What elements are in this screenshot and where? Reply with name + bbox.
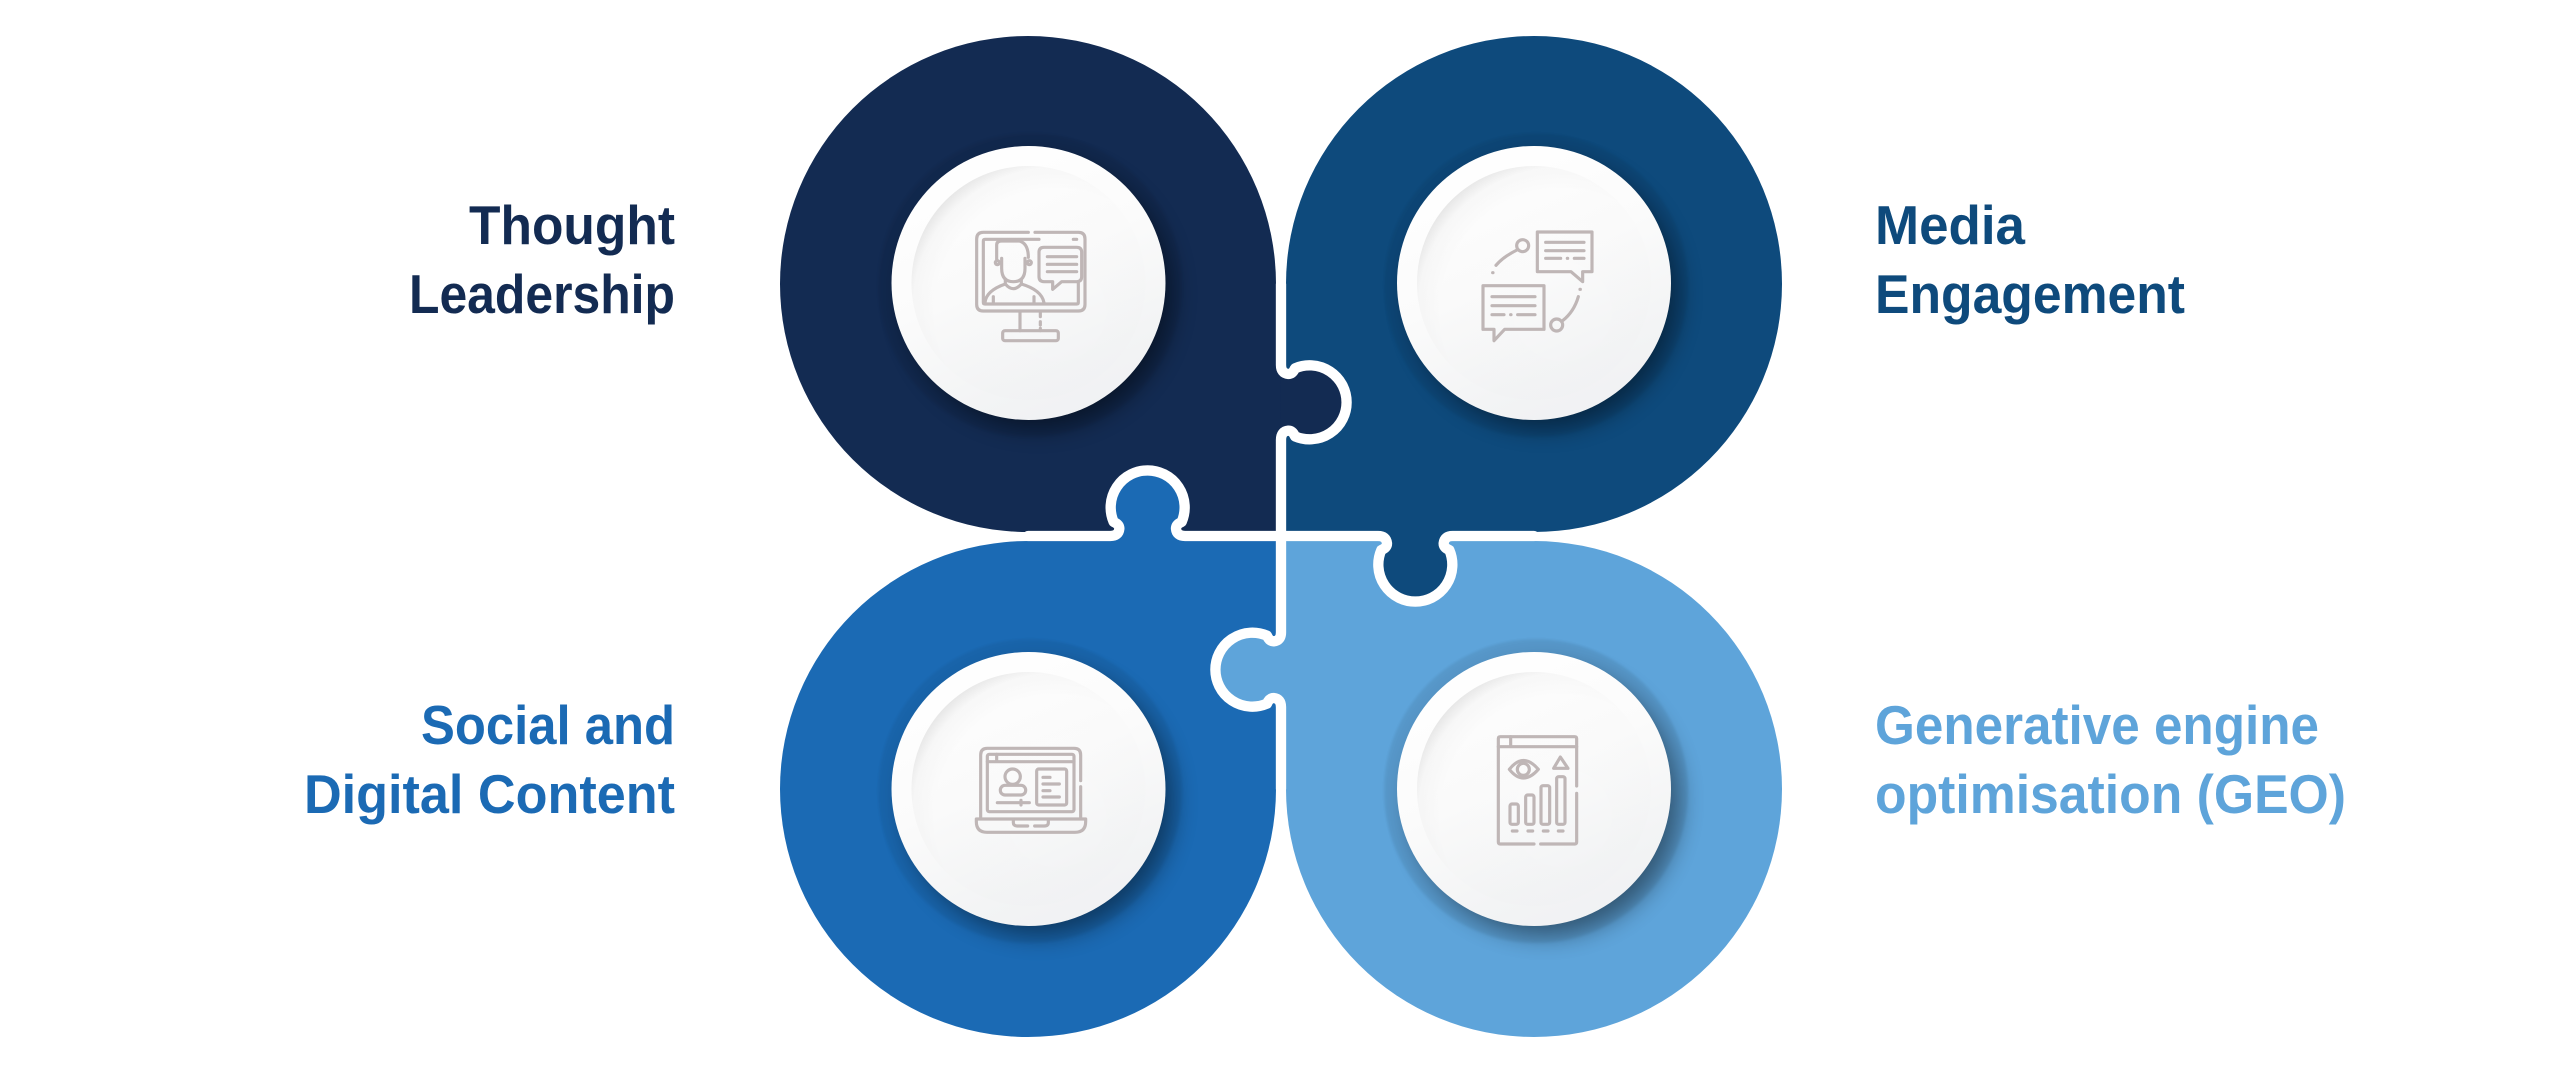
puzzle tabs — [1110, 365, 1453, 707]
puzzle graphic — [780, 36, 1782, 1037]
label: media engagement — [1875, 194, 2185, 325]
label: media engagement: Engagement — [1875, 263, 2185, 325]
disc: thought leadership — [878, 133, 1182, 437]
icon: monitor with presenter — [977, 232, 1085, 341]
tab: thought leadership — [1281, 365, 1347, 440]
piece: thought leadership — [780, 36, 1281, 536]
icon: analytics page with eye — [1498, 737, 1577, 844]
label: media engagement: Media — [1875, 194, 2025, 256]
puzzle seams — [1028, 284, 1534, 789]
label: generative engine optimisation — [1875, 694, 2346, 825]
tab: social and digital content — [1110, 470, 1185, 536]
piece: generative engine optimisation — [1281, 536, 1782, 1037]
label: generative engine optimisation: Generative engine — [1875, 694, 2319, 756]
label: social and digital content — [304, 694, 675, 825]
piece: media engagement — [1281, 36, 1782, 536]
label: thought leadership: Thought — [469, 194, 675, 256]
icon: speech bubbles exchange — [1483, 232, 1592, 341]
label: social and digital content: Digital Content — [304, 763, 675, 825]
piece: social and digital content — [780, 536, 1281, 1037]
label: thought leadership: Leadership — [409, 263, 675, 325]
disc: generative engine optimisation — [1384, 639, 1688, 943]
icon: laptop with profile — [976, 748, 1086, 832]
label: social and digital content: Social and — [421, 694, 675, 756]
tab: generative engine optimisation — [1215, 632, 1281, 707]
disc: media engagement — [1384, 133, 1688, 437]
tab: media engagement — [1378, 536, 1453, 602]
label: thought leadership — [409, 194, 675, 325]
label: generative engine optimisation: optimisation (GEO) — [1875, 763, 2346, 825]
disc: social and digital content — [878, 639, 1182, 943]
